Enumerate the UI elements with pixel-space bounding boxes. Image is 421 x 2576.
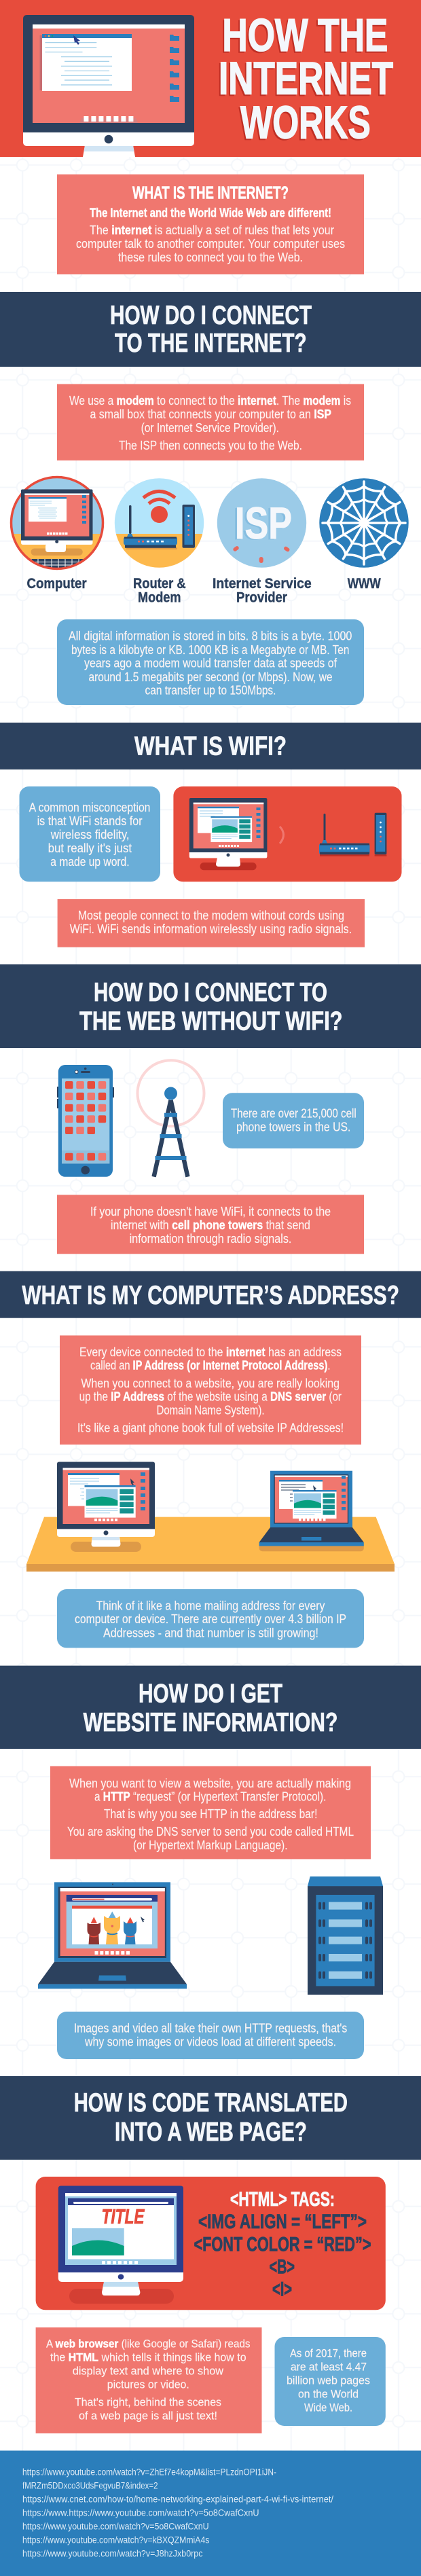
icon: wifi signal arc (280, 827, 284, 843)
icon: desktop monitor (23, 15, 194, 157)
callout: wifi misconception: but really it's just (48, 841, 132, 855)
label: internet service provider: Internet Service (213, 576, 312, 592)
panel: web browser explanation: pictures or video. (107, 2379, 189, 2391)
callout: wifi misconception: is that WiFi stands for (37, 814, 143, 828)
panel: HTTP request: When you want to view a website, you are actually making (69, 1777, 351, 1790)
callout: bits and bytes: years ago a modem would transfer data at speeds of (84, 657, 337, 670)
callout: cell tower count: There are over 215,000 cell (231, 1106, 356, 1120)
panel: web browser explanation: That's right, behind the scenes (75, 2396, 221, 2408)
callout: cell tower count (223, 1093, 364, 1148)
heading: what is the internet: WHAT IS THE INTERNET? (132, 184, 289, 203)
callout: wifi misconception: wireless fidelity, (50, 828, 130, 841)
callout: web page count (274, 2337, 386, 2426)
callout: wifi misconception: a made up word. (50, 855, 130, 869)
panel: wifi explanation (58, 899, 365, 947)
label: www: WWW (348, 576, 381, 592)
icon: computer circle (10, 475, 105, 575)
callout: web page count: As of 2017, there (290, 2347, 367, 2359)
label: internet service provider: Provider (236, 590, 287, 606)
icon: cell tower (137, 1060, 204, 1177)
illustration: desk with computers (26, 1462, 395, 1572)
callout: bits and bytes: can transfer up to 150Mbps. (145, 684, 276, 697)
callout: mailing address analogy (57, 1589, 364, 1648)
panel: html tags (36, 2177, 386, 2310)
panel: web browser explanation (36, 2327, 261, 2433)
panel: modem explanation (57, 384, 364, 460)
cat: yellow (104, 1911, 120, 1944)
footer: sources: fMRZm5DDxco3UdsFegvuB7&index=2 (22, 2480, 158, 2491)
label: router and modem: Modem (138, 590, 181, 606)
callout: http requests for media: Images and video all take their own HTTP requests, that's (74, 2021, 347, 2035)
label: router and modem (133, 576, 186, 606)
section band: without wifi: HOW DO I CONNECT TO (94, 978, 327, 1007)
footer: sources: https://www.https://www.youtube.com/watch?v=5o8CwafCxnU (22, 2508, 259, 2518)
panel: IP address explanation: Every device connected to the internet has an address (79, 1345, 342, 1359)
section band: computer address (0, 1271, 421, 1318)
icon: desktop monitor (57, 1462, 155, 1552)
icon: ISP circle: ISP (235, 498, 292, 548)
icon: monitor showing web page (58, 2185, 183, 2304)
callout: web page count: are at least 4.47 (291, 2361, 367, 2374)
panel: cell phone towers explanation (57, 1195, 364, 1254)
section band: how do I connect: TO THE INTERNET? (115, 329, 307, 358)
panel: HTTP request: That is why you see HTTP in the address bar! (104, 1807, 317, 1821)
callout: bits and bytes: around 1.5 megabits per second (or Mbps). Now, we (88, 670, 333, 684)
title: WORKS (239, 98, 369, 149)
panel: cell phone towers explanation: If your phone doesn't have WiFi, it connects to the (90, 1205, 331, 1218)
cat: red (87, 1917, 100, 1944)
subheading: The Internet and the World Wide Web are different! (90, 206, 331, 219)
callout: cell tower count: phone towers in the US. (236, 1120, 350, 1133)
section band: code translated (0, 2076, 421, 2160)
section band: what is wifi (0, 723, 421, 769)
panel: IP address explanation: called an IP Address (or Internet Protocol Address). (90, 1358, 330, 1372)
title: WORKS (240, 96, 371, 148)
html tag list: <B> (270, 2256, 295, 2278)
panel: IP address explanation: It's like a giant phone book full of website IP Addresses! (77, 1421, 344, 1435)
footer: sources: https://www.youtube.com/watch?v=5o8CwafCxnU (22, 2521, 209, 2531)
panel: web browser explanation: of a web page is all just text! (79, 2410, 217, 2423)
footer: sources: https://www.youtube.com/watch?v=J8hzJxb0rpc (22, 2548, 203, 2559)
callout: mailing address analogy: Think of it like a home mailing address for every (96, 1599, 325, 1612)
panel: wifi illustration (173, 786, 402, 882)
panel: cell phone towers explanation: internet with cell phone towers that send (111, 1218, 310, 1232)
callout: web page count: on the World (298, 2388, 359, 2400)
icon: ISP circle: ISP (233, 498, 290, 549)
section band: website information (0, 1666, 421, 1749)
panel: web browser explanation: display text and where to show (73, 2365, 223, 2378)
title (217, 10, 393, 149)
panel: web browser explanation: the HTML which tells it things like how to (50, 2352, 246, 2364)
label: router and modem: Router & (133, 576, 186, 592)
cat: blue (124, 1917, 136, 1944)
panel: modem explanation: a small box that connects your computer to an ISP (90, 407, 331, 421)
footer: sources (0, 2450, 421, 2576)
header banner (0, 0, 421, 157)
label: computer: Computer (27, 576, 87, 592)
footer: sources: https://www.youtube.com/watch?v=ZhEf7e4kopM&list=PLzdnOPI1iJN- (22, 2467, 276, 2477)
footer: sources: https://www.youtube.com/watch?v=kBXQZMmiA4s (22, 2535, 210, 2545)
callout: http requests for media (57, 2012, 364, 2059)
icon: laptop (259, 1471, 364, 1551)
callout: mailing address analogy: computer or device. There are currently over 4.3 billion IP (75, 1612, 346, 1626)
section band: website information: HOW DO I GET (139, 1679, 282, 1709)
panel: modem explanation: The ISP then connects you to the Web. (119, 439, 302, 452)
html tag list: <I> (272, 2279, 292, 2301)
text block: these rules to connect you to the Web. (118, 251, 303, 264)
panel: IP address explanation (60, 1335, 361, 1445)
html tag list (194, 2188, 371, 2301)
callout: wifi misconception: A common misconception (29, 801, 150, 814)
panel: wifi explanation: Most people connect to the modem without cords using (78, 909, 344, 922)
icon: server (308, 1876, 383, 1995)
section band: how do I connect (0, 292, 421, 367)
section band: without wifi: THE WEB WITHOUT WIFI? (79, 1007, 342, 1036)
callout: web page count: Wide Web. (304, 2401, 352, 2414)
desk (26, 1517, 395, 1572)
panel: IP address explanation: Domain Name System). (156, 1403, 265, 1417)
panel: cell phone towers explanation: information through radio signals. (130, 1232, 291, 1246)
section band: what is wifi: WHAT IS WIFI? (134, 732, 287, 761)
panel: what is the internet (57, 175, 364, 274)
text block (76, 223, 345, 264)
icon: router and modem circle (114, 478, 204, 568)
icon: router and modem (319, 813, 386, 856)
panel: web browser explanation: A web browser (like Google or Safari) reads (46, 2338, 250, 2350)
html tag list: <IMG ALIGN = “LEFT”> (198, 2211, 367, 2233)
panel: wifi explanation: WiFi. WiFi sends information wirelessly using radio signals. (70, 922, 352, 936)
label: internet service provider (213, 576, 312, 606)
callout: mailing address analogy: Addresses - and that number is still growing! (103, 1626, 318, 1639)
panel: HTTP request: a HTTP “request” (or Hypertext Transfer Protocol). (94, 1790, 326, 1804)
section band: without wifi (0, 964, 421, 1048)
footer: sources: https://www.cnet.com/how-to/home-networking-explained-part-4-wi-fi-vs-internet/ (22, 2495, 333, 2505)
panel: HTTP request: (or Hypertext Markup Language). (133, 1838, 288, 1852)
callout: bits and bytes: All digital information is stored in bits. 8 bits is a byte. 1000 (69, 630, 352, 643)
section band: how do I connect: HOW DO I CONNECT (110, 301, 312, 330)
panel: HTTP request: You are asking the DNS server to send you code called HTML (67, 1825, 354, 1838)
title sample: TITLE (102, 2205, 145, 2228)
text block: computer talk to another computer. Your computer uses (76, 237, 345, 251)
panel: IP address explanation: up the IP Address of the website using a DNS server (or (79, 1390, 342, 1403)
icon: ISP circle (217, 478, 306, 568)
text block: The internet is actually a set of rules that lets your (90, 223, 334, 237)
callout: http requests for media: why some images or videos load at different speeds. (84, 2035, 336, 2049)
panel: modem explanation: (or Internet Service Provider). (141, 421, 279, 435)
section band: code translated: INTO A WEB PAGE? (115, 2118, 307, 2147)
icon: smartphone (57, 1065, 114, 1177)
icon: laptop with cats (38, 1882, 187, 1989)
callout: web page count: billion web pages (287, 2375, 370, 2387)
panel: modem explanation: We use a modem to connect to the internet. The modem is (69, 394, 351, 407)
panel: IP address explanation: When you connect to a website, you are really looking (81, 1377, 340, 1390)
panel: HTTP request (50, 1766, 371, 1859)
html tag list: <HTML> TAGS: (230, 2188, 335, 2211)
callout: bits and bytes (57, 619, 364, 705)
callout: bits and bytes: bytes is a kilobyte or KB. 1000 KB is a Megabyte or MB. Ten (71, 643, 349, 657)
icon: WWW spider web circle (319, 478, 409, 568)
section band: website information: WEBSITE INFORMATION? (84, 1708, 337, 1737)
icon: monitor (189, 798, 267, 870)
callout: wifi misconception (19, 786, 160, 882)
